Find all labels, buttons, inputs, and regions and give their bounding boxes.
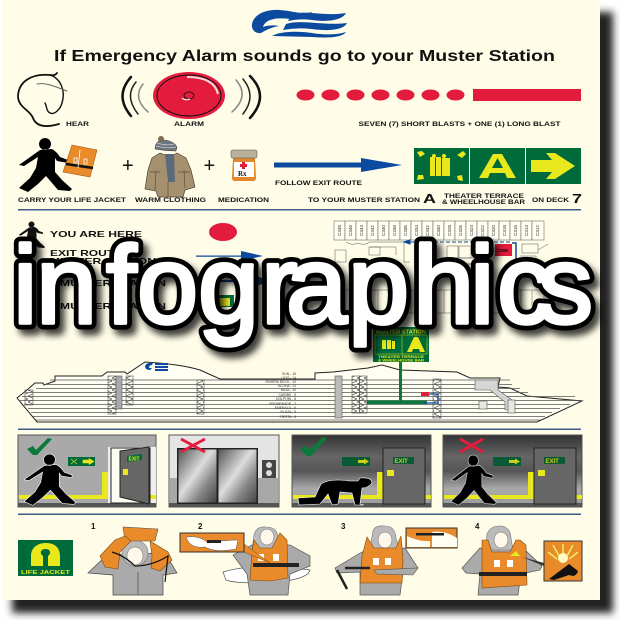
- muster station sign on ship: MUSTER STATION: [376, 330, 426, 336]
- label: carry your life jacket: CARRY YOUR LIFE JACKET: [18, 197, 126, 204]
- panel: crawl under smoke: [292, 435, 431, 507]
- overlay wordmark: infographics: infographics: [13, 224, 593, 347]
- cabin numbers: C328: [447, 225, 452, 236]
- muster station sign row: [414, 148, 581, 184]
- figure 1: put jacket over head: [88, 527, 177, 595]
- cabin numbers: C316: [513, 225, 518, 236]
- cabin numbers: C318: [502, 225, 507, 236]
- label: theater terrace and wheelhouse bar: & WHEELHOUSE BAR: [442, 200, 526, 206]
- deck names: CARIBE - 9: [278, 393, 296, 397]
- deck names: FIESTA - 4: [280, 415, 296, 419]
- deck names: ALOHA - 11: [278, 384, 296, 388]
- panel: do not walk in smoke: [443, 435, 582, 507]
- deck plan: [334, 221, 550, 313]
- cabin numbers: C326: [458, 225, 463, 236]
- panel: do not walk in smoke: EXIT: [546, 459, 559, 465]
- deck names: BAJA - 10: [281, 388, 296, 392]
- title: If Emergency Alarm sounds go to your Muster Station: [54, 48, 555, 65]
- cabin numbers: C332: [425, 225, 430, 236]
- legend: red dot: [209, 223, 237, 241]
- step numbers: 1: [91, 522, 96, 531]
- overlay wordmark: infographics: infographics: [18, 230, 598, 353]
- label: hear: HEAR: [66, 121, 89, 128]
- cabin numbers: C314: [524, 225, 529, 236]
- deck names: [265, 372, 296, 419]
- logo: [252, 10, 347, 37]
- label: medication: MEDICATION: [218, 197, 269, 204]
- muster station sign on ship: THEATER TERRACE: [378, 355, 424, 359]
- panel: walk to exit: EXIT: [128, 456, 140, 462]
- walking person: [451, 455, 496, 505]
- route on ship: [367, 362, 438, 404]
- label: exit route to muster station: MUSTER STATION: [50, 256, 156, 266]
- life jacket sign: LIFE JACKET: [21, 570, 71, 576]
- muster station sign on ship: [373, 327, 429, 362]
- plus sign: +: [122, 155, 134, 177]
- legend: muster icon: [214, 295, 234, 307]
- cabin row: [334, 221, 544, 240]
- deck names: PROMENADE - 7: [269, 402, 296, 406]
- logo on funnel: [145, 363, 168, 371]
- legend: blue arrow: [196, 251, 263, 261]
- deck names: EMERALD - 6: [275, 406, 296, 410]
- label: theater terrace and wheelhouse bar: [442, 194, 526, 206]
- muster station sign on ship: & WHEELHOUSE BAR: [378, 358, 425, 362]
- overlay wordmark: infographics: infographics: [13, 224, 593, 347]
- cabin numbers: C330: [436, 225, 441, 236]
- icon: person carrying life jacket: [19, 138, 97, 192]
- cabin numbers: C322: [480, 225, 485, 236]
- stairwells: [25, 376, 515, 418]
- cabin numbers: C348: [337, 225, 342, 236]
- figure 2: fasten strap: [180, 527, 310, 595]
- cabin numbers: C324: [469, 225, 474, 236]
- label: theater terrace and wheelhouse bar: THEATER TERRACE: [444, 194, 524, 200]
- label: route to muster station: MUSTER STATION: [60, 278, 166, 288]
- cabin numbers: C342: [370, 225, 375, 236]
- exit route dashed: [404, 240, 516, 259]
- seven short blasts and one long blast: [296, 89, 581, 101]
- deck lines: [19, 380, 578, 420]
- icon: medication bottle: [231, 150, 257, 181]
- current cabin highlighted: C308: [497, 248, 508, 253]
- deck names: SUN - 15: [282, 372, 296, 376]
- label: follow exit route: FOLLOW EXIT ROUTE: [275, 180, 363, 187]
- deck names: PLAZA - 5: [281, 410, 296, 414]
- label: warm clothing: WARM CLOTHING: [135, 197, 206, 204]
- label: muster station: MUSTER STATION: [60, 301, 166, 311]
- cabin numbers: C336: [403, 225, 408, 236]
- check mark: [300, 437, 327, 456]
- cabin numbers: C312: [535, 225, 540, 236]
- icon: warm clothing: [145, 136, 195, 197]
- cabin numbers: C334: [414, 225, 419, 236]
- step numbers: 2: [198, 522, 203, 531]
- cabin numbers: C344: [359, 225, 364, 236]
- step numbers: 4: [475, 522, 480, 531]
- crawling person: [298, 478, 372, 505]
- label: on deck: ON DECK: [532, 197, 569, 204]
- icon: alarm bell: [122, 72, 260, 119]
- label: alarm: ALARM: [174, 121, 204, 128]
- deck names: LIDO - 14: [281, 376, 296, 380]
- cabin numbers: C320: [491, 225, 496, 236]
- cabin numbers: C346: [348, 225, 353, 236]
- step numbers: 3: [341, 522, 346, 531]
- label: station letter A: A: [423, 191, 437, 206]
- label: you are here: YOU ARE HERE: [50, 229, 142, 239]
- panel: walk to exit: [18, 435, 156, 507]
- interior rooms: [334, 242, 550, 313]
- red cross: [460, 439, 483, 452]
- label: exit route to muster station: [50, 248, 156, 266]
- cabin numbers: [337, 225, 540, 236]
- deck names: RIVIERA DECK - 12: [265, 380, 296, 384]
- cabin numbers: C338: [392, 225, 397, 236]
- icon: ear: [18, 73, 67, 126]
- label: blasts: SEVEN (7) SHORT BLASTS + ONE (1) LONG BLAST: [358, 121, 561, 128]
- life jacket sign: [18, 540, 73, 576]
- icon: medication bottle: Rx: [238, 170, 247, 178]
- current cabin highlighted: [495, 244, 512, 256]
- walking person: [24, 454, 76, 505]
- label: exit route to muster station: EXIT ROUTE TO: [50, 248, 143, 258]
- check mark: [27, 438, 52, 455]
- arrow: follow exit route: [274, 158, 402, 172]
- red cross: [181, 439, 205, 452]
- panel: do not use elevator: [169, 435, 279, 507]
- plus sign: +: [204, 155, 215, 177]
- panel: crawl under smoke: EXIT: [394, 459, 408, 465]
- figure 4: light and whistle: [462, 526, 582, 595]
- icon: you are here person: [18, 222, 45, 248]
- figure 3: tighten strap: [335, 526, 457, 595]
- ship elevation: [17, 362, 582, 422]
- cabin numbers: C340: [381, 225, 386, 236]
- deck names: DOLPHIN - 8: [276, 397, 296, 401]
- label: deck number: 7: [572, 191, 582, 206]
- label: to your muster station: TO YOUR MUSTER STATION: [308, 197, 420, 204]
- legend: second blue arrow: [200, 276, 275, 286]
